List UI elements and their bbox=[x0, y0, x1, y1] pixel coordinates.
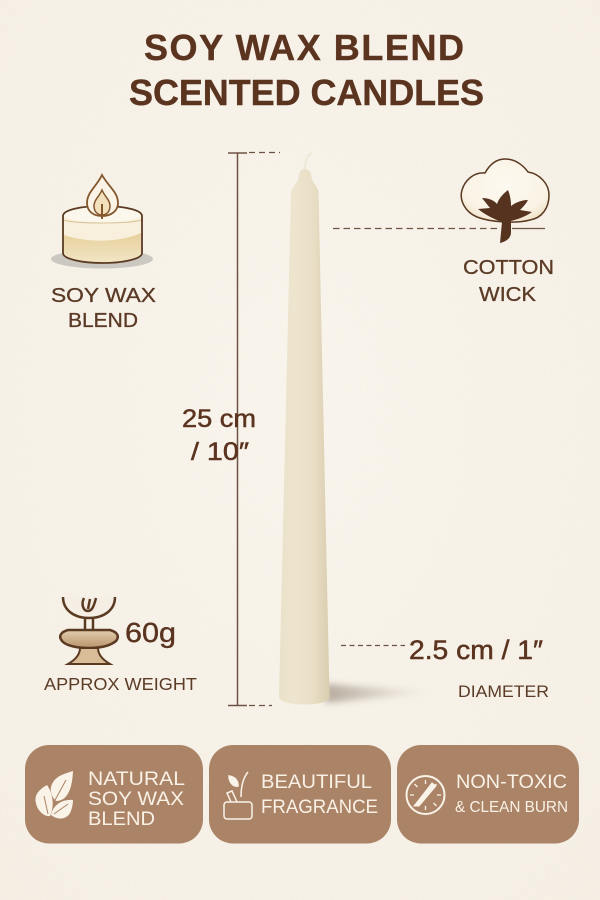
label: natural soy wax blend bbox=[88, 768, 185, 830]
title: SCENTED CANDLES bbox=[129, 72, 484, 113]
panel: weight bbox=[44, 597, 197, 694]
label: 60g: 60g bbox=[125, 617, 176, 648]
diameter leader line bbox=[341, 644, 405, 646]
height label bbox=[182, 405, 256, 466]
label: clean burn: & CLEAN BURN bbox=[455, 799, 568, 816]
label: soy wax blend: SOY WAX bbox=[51, 285, 156, 307]
title bbox=[129, 27, 484, 113]
label: diameter value: 2.5 cm / 1″ bbox=[409, 635, 543, 665]
label: cotton wick: WICK bbox=[479, 284, 537, 306]
label: natural soy wax blend: NATURAL bbox=[88, 768, 185, 790]
icon: leaves bbox=[35, 771, 73, 819]
panel: soy wax blend bbox=[51, 175, 156, 332]
candle wick bbox=[305, 154, 311, 172]
icon: crossed gauge bbox=[406, 776, 444, 814]
icon: candle with sprig bbox=[224, 772, 252, 819]
wick leader line bbox=[333, 228, 498, 230]
panel: natural soy wax blend bbox=[25, 745, 203, 844]
label: beautiful fragrance: BEAUTIFUL bbox=[261, 771, 372, 793]
candle body bbox=[279, 169, 330, 704]
panel: non-toxic bbox=[397, 745, 579, 844]
icon: tealight candle bbox=[51, 175, 153, 268]
panel: diameter bbox=[341, 635, 549, 701]
panel: beautiful fragrance bbox=[209, 745, 391, 844]
label: cotton wick bbox=[463, 257, 554, 306]
label: soy wax blend bbox=[51, 285, 156, 332]
icon: scale bbox=[60, 597, 118, 664]
height label: / 10″ bbox=[191, 438, 249, 466]
label: soy wax blend: BLEND bbox=[68, 310, 138, 332]
label: diameter: DIAMETER bbox=[458, 683, 549, 701]
label: approx weight: APPROX WEIGHT bbox=[44, 674, 197, 694]
candle bbox=[279, 154, 440, 704]
label: cotton wick: COTTON bbox=[463, 257, 554, 279]
label: natural soy wax blend: SOY WAX bbox=[88, 788, 184, 810]
panel: cotton wick bbox=[333, 159, 554, 306]
label: beautiful fragrance bbox=[261, 771, 378, 818]
label: non-toxic: NON-TOXIC bbox=[456, 771, 567, 793]
candle shadow bbox=[326, 684, 440, 703]
title: SOY WAX BLEND bbox=[144, 27, 464, 68]
label: natural soy wax blend: BLEND bbox=[88, 808, 155, 830]
height label: 25 cm bbox=[182, 405, 256, 433]
icon: cotton boll bbox=[461, 159, 549, 243]
label: beautiful fragrance: FRAGRANCE bbox=[261, 796, 378, 818]
height dimension line bbox=[228, 152, 280, 706]
